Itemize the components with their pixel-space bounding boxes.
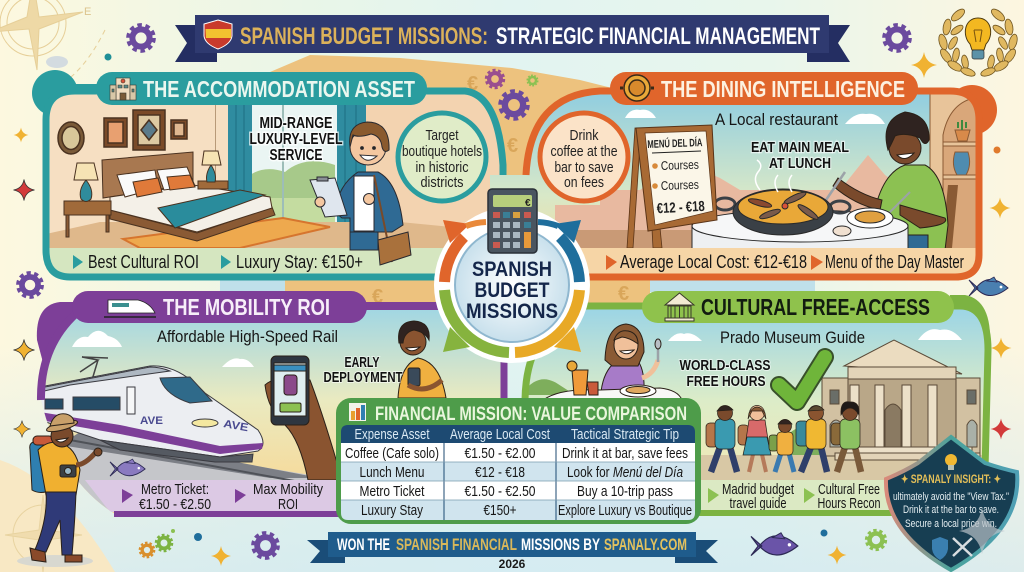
footer ribbon [307,532,718,563]
icon: paella pan [620,75,654,101]
table rows: €150+ [484,502,517,519]
title text [240,23,820,50]
menu board: Courses [661,178,699,193]
table rows: Average Local Cost [450,426,551,443]
callout: world-class free hours: FREE HOURS [686,373,766,390]
group of walking visitors [706,402,861,472]
background: € [618,283,629,305]
table rows: Coffee (Cafe solo) [345,445,439,462]
callout: coffee at bar [540,113,628,201]
callout: early deployment: DEPLOYMENT [324,370,403,386]
heading pill [72,291,367,323]
heading: dining: THE DINING INTELLIGENCE [661,76,905,102]
panel: the accommodation asset [32,70,506,281]
icon: calculator: € [525,198,531,209]
train [40,357,263,462]
callout: coffee at bar: on fees [564,174,604,191]
callout: eat main meal [751,139,849,172]
callout: early deployment [324,355,403,386]
strip: mobility facts: Max Mobility [253,481,323,498]
panel: cultural free-access [520,291,990,516]
icon: Spanish flag shield [204,20,232,49]
callout: mid-range luxury: MID-RANGE [260,115,332,132]
heading: cultural: CULTURAL FREE-ACCESS [701,294,930,320]
menu board: MENÚ DEL DÍA [647,136,703,151]
fish [110,459,145,476]
footer text: SPANALY.COM [604,536,687,554]
cafe table [543,361,682,400]
heading pill [642,291,954,323]
table rows [341,425,695,520]
museum building [822,340,980,460]
panel: the mobility ROI [30,291,510,517]
bushes [528,379,820,455]
insight text: Secure a local price win. [905,518,997,530]
callout: mid-range luxury: LUXURY-LEVEL [250,131,342,148]
callout: boutique hotels: districts [420,174,464,191]
clouds [625,110,885,124]
strip: accommodation facts: Best Cultural ROI [88,252,199,272]
clouds [668,329,962,341]
check mark fill [779,357,825,402]
banner ribbon [175,15,850,62]
callout: eat main meal: AT LUNCH [769,155,831,172]
callout: mid-range luxury: SERVICE [270,147,322,164]
compass top left: E [84,6,91,18]
strip: mobility facts: Metro Ticket: [141,481,209,498]
subtitle: Prado guide: Prado Museum Guide [720,328,865,347]
heading: mobility: THE MOBILITY ROI [163,294,330,320]
subtitle: high-speed rail: Affordable High-Speed Rail [157,327,338,346]
callout: coffee at bar: coffee at the [550,143,618,160]
background: € [372,286,383,308]
strip: cultural facts: Madrid budget [722,481,795,498]
callout: eat main meal: EAT MAIN MEAL [751,139,849,156]
table rows: Explore Luxury vs Boutique [558,502,692,519]
ring arrow: orange [443,220,486,282]
table rows: €12 - €18 [475,464,525,481]
scene: high-speed train [30,306,510,516]
table rows: Luxury Stay [361,502,423,519]
background: € [467,73,478,95]
icon: hotel building [110,78,136,100]
menu board: €12 - €18 [656,199,705,217]
callout: coffee at bar: bar to save [554,159,614,176]
hand holding phone [265,356,342,480]
callout: boutique hotels: in historic [416,159,469,176]
icon: calculator [488,189,537,253]
table rows: €1.50 - €2.00 [464,445,536,462]
ring arrow: blue [538,220,581,282]
icon: fish bottom [751,533,798,556]
scene: restaurant [490,91,980,281]
icon: bar chart [349,403,366,421]
woman dining [601,324,661,392]
compass top left [0,0,105,85]
table rows: Buy a 10-trip pass [577,483,673,500]
title banner [175,15,850,62]
footer text: MISSIONS BY [521,536,600,554]
title text: SPANISH BUDGET MISSIONS: [240,23,488,50]
hub title [466,257,558,323]
callout: world-class free hours: WORLD-CLASS [680,357,770,374]
icon: crossed swords [953,538,972,556]
callout: boutique hotels: Target [426,127,459,144]
strip: dining facts: Menu of the Day Master [825,252,964,272]
menu board: Courses [661,158,699,173]
window [228,104,366,222]
footer banner [307,532,718,563]
icon: fish top right [969,277,1008,296]
icon: laurel with light bulb [937,7,1019,78]
compass bottom left [5,495,82,572]
callout: mid-range luxury [250,115,342,164]
strip: mobility facts: ROI [278,496,298,513]
table rows: Lunch Menu [360,464,424,481]
footer text: SPANISH FINANCIAL [396,536,517,554]
chair [946,185,958,248]
table rows: Metro Ticket [360,483,425,500]
strip: cultural facts: travel guide [730,495,786,512]
icon: insight bulb [945,454,957,470]
icon: temple [665,293,694,321]
scene: high-speed train: AVE [222,418,249,434]
subtitle: local restaurant: A Local restaurant [715,110,838,129]
inner disc [455,228,569,342]
check mark outline [779,357,825,402]
hub title: MISSIONS [466,299,558,323]
scene: hotel room [46,91,506,281]
nightstands and lamps [64,151,228,237]
hub title: SPANISH [472,257,552,281]
strip: cultural facts [701,480,889,510]
menu board [627,125,717,248]
ring arrow: green [443,290,509,352]
bed [102,152,275,241]
central hub [434,189,590,363]
insight shield [886,437,1017,570]
title text: STRATEGIC FINANCIAL MANAGEMENT [496,23,820,50]
person with phone [398,321,446,398]
heading: accommodation: THE ACCOMMODATION ASSET [143,76,415,102]
sparkle overlay [959,508,1005,554]
heading pill [610,72,918,105]
person eating [826,112,948,250]
icon: small shield [932,537,948,560]
table rows: Look for Menú del Día [567,464,683,481]
callout: early deployment: EARLY [344,355,380,371]
clouds [72,331,254,367]
wall frames [58,110,187,154]
strip: accommodation facts [50,248,444,274]
insight text [893,474,1009,530]
strip: accommodation facts: Luxury Stay: €150+ [236,252,363,272]
rug [123,218,330,248]
illustration: backpacker [17,414,102,567]
background: € [507,135,518,157]
callout: coffee at bar: Drink [570,127,599,144]
table heading: FINANCIAL MISSION: VALUE COMPARISON [375,404,687,425]
year: 2026 [499,557,526,571]
scene: Prado museum [520,306,990,516]
callout: world-class free hours [680,357,770,390]
panel: the dining intelligence [490,72,997,281]
footer text [337,536,687,554]
table rows: Drink it at bar, save fees [562,445,688,462]
table rows: Expense Asset [354,426,430,443]
strip: dining facts: Average Local Cost: €12-€18 [620,252,807,272]
strip: mobility facts [85,480,342,513]
table rows: €1.50 - €2.50 [464,483,536,500]
heading pill [96,72,427,105]
scene: high-speed train: AVE [140,415,163,427]
table with paella [692,160,908,252]
callout: boutique hotels: boutique hotels [402,143,482,160]
callout: boutique hotels [398,113,486,201]
hub title: BUDGET [474,278,550,302]
table rows: Tactical Strategic Tip [571,426,679,443]
strip: dining facts [580,248,976,274]
icon: train [104,300,156,317]
value comparison table [336,398,701,524]
strip: cultural facts: Cultural Free [818,481,880,498]
ring arrow: gold [515,290,581,352]
wall with arch niche [930,94,976,248]
footer text: WON THE [337,536,390,554]
strip: cultural facts: Hours Recon [818,495,880,512]
strip: mobility facts: €1.50 - €2.50 [139,496,211,513]
illustration: traveller with clipboard [310,122,411,265]
